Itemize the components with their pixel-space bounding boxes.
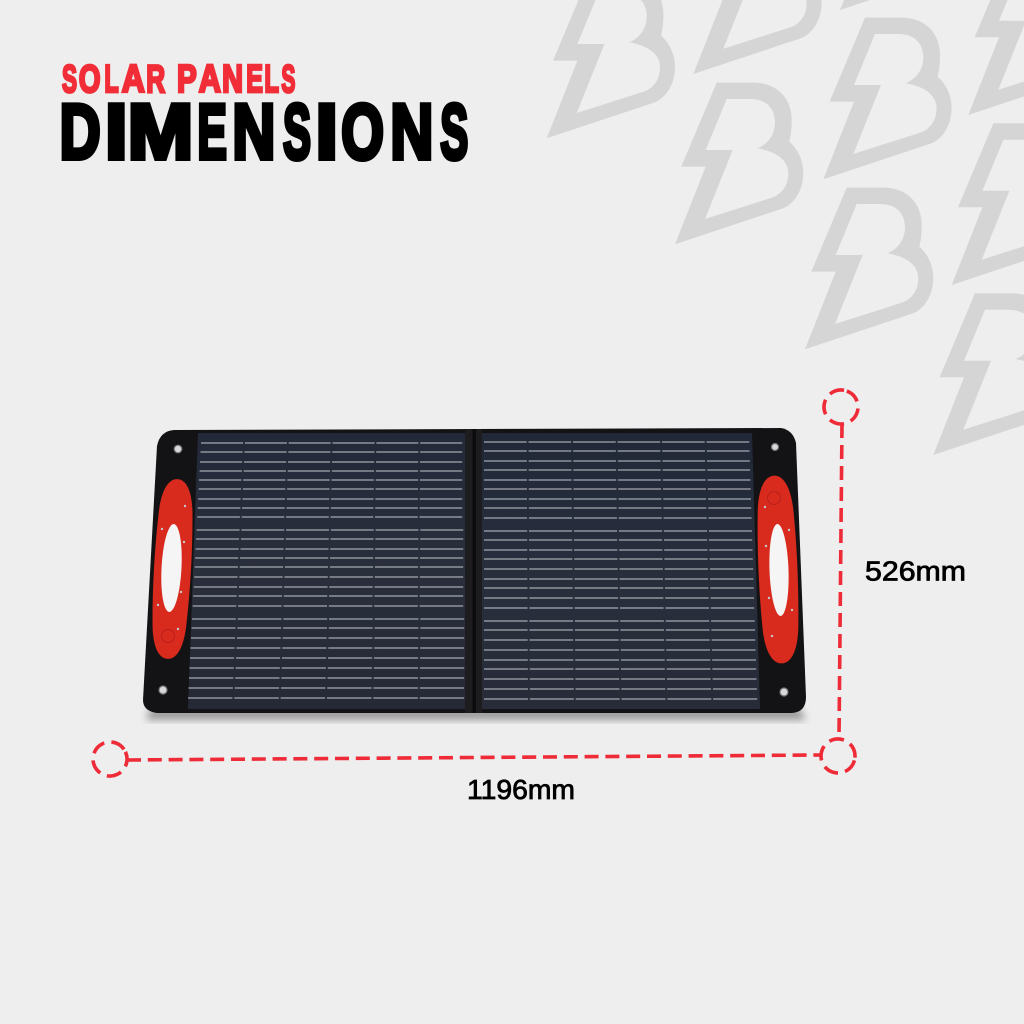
- centre fold seam: [465, 429, 482, 713]
- heading: dimensions: D: [60, 88, 101, 176]
- folded solar panel photo illustration: [143, 428, 806, 720]
- label: height value: 526mm: [865, 556, 966, 586]
- horizontal dashed line: [127, 755, 821, 760]
- heading: solar panels: P: [177, 58, 197, 101]
- left marker circle: [87, 736, 133, 782]
- heading: solar panels: E: [246, 58, 263, 101]
- heading: solar panels: S: [281, 58, 295, 101]
- right red handle: [755, 475, 801, 664]
- background pattern: lightning B logos: [547, 0, 1024, 455]
- panel frame: [143, 428, 806, 713]
- heading: solar panels: A: [199, 58, 221, 101]
- heading: dimensions: O: [341, 88, 384, 176]
- heading: solar panels: R: [146, 58, 165, 101]
- heading: dimensions: S: [283, 88, 311, 176]
- heading: dimensions: S: [440, 88, 468, 176]
- left solar glass: [188, 433, 465, 709]
- top marker circle: [819, 385, 863, 429]
- left red handle: [149, 478, 196, 660]
- title block: [60, 58, 468, 176]
- metal grommets: [159, 444, 788, 696]
- left panel cell lines: [188, 443, 466, 698]
- heading: dimensions: E: [197, 88, 227, 176]
- heading: solar panels: S: [62, 58, 77, 101]
- heading: dimensions: I: [105, 88, 128, 176]
- heading: dimensions: N: [390, 88, 433, 176]
- panel shadow: [146, 708, 806, 720]
- heading: dimensions: M: [128, 88, 193, 176]
- width dimension line: [87, 736, 821, 782]
- bottom marker circle: [817, 735, 859, 777]
- heading: solar panels: L: [264, 58, 279, 101]
- heading: dimensions: N: [232, 88, 275, 176]
- label: width value: 1196mm: [467, 774, 575, 805]
- right panel cell lines: [484, 442, 759, 699]
- heading: solar panels: O: [79, 58, 100, 101]
- heading: solar panels: N: [222, 58, 243, 101]
- right solar glass: [482, 433, 760, 709]
- heading: solar panels: A: [122, 58, 145, 101]
- height dimension line: [817, 385, 863, 777]
- vertical dashed line: [839, 424, 842, 738]
- heading: solar panels: L: [104, 58, 119, 101]
- heading: dimensions: I: [316, 88, 338, 176]
